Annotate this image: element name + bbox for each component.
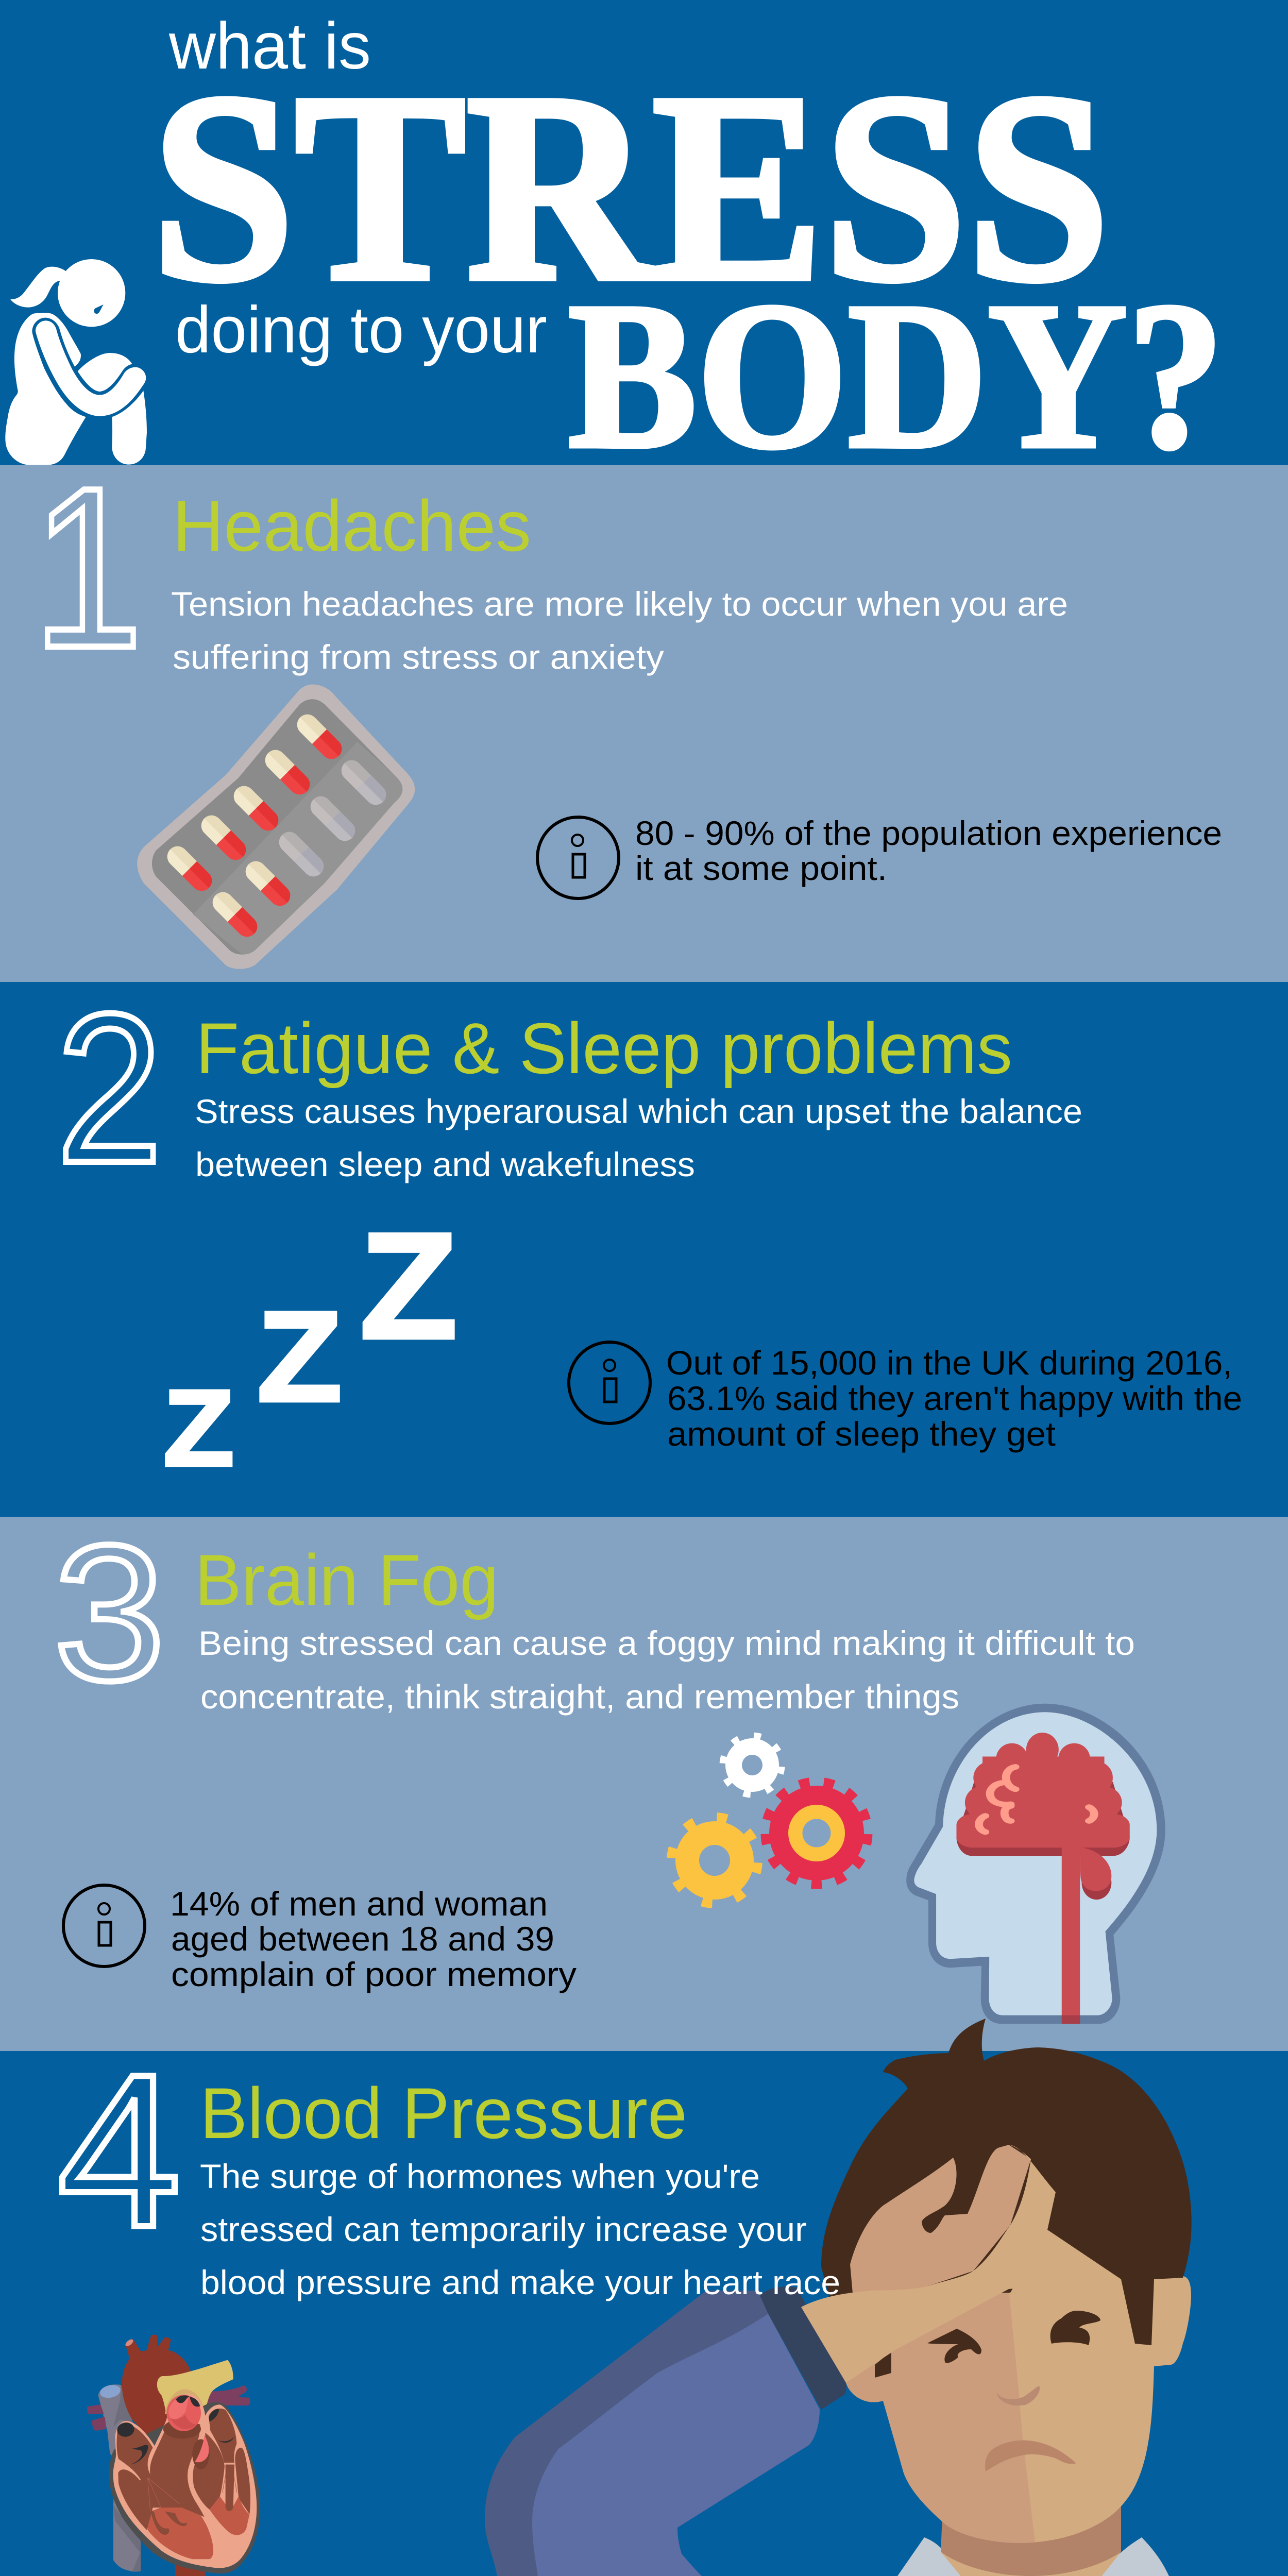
panel: brain fog background xyxy=(0,1517,1288,2051)
callout: population statistic xyxy=(635,814,1222,887)
text: brain fog description: Being stressed can cause a foggy mind making it difficult to xyxy=(198,1624,1135,1662)
callout: population statistic: 80 - 90% of the population experience xyxy=(635,814,1222,852)
icon: head with brain xyxy=(906,1704,1165,2024)
text: headaches description xyxy=(171,585,1068,676)
panel: fatigue background xyxy=(0,982,1288,1517)
icon: info xyxy=(537,817,619,899)
callout: memory statistic: complain of poor memory xyxy=(171,1955,577,1993)
callout: sleep survey statistic xyxy=(666,1344,1242,1453)
heading: blood pressure: Blood Pressure xyxy=(200,2073,687,2154)
icon: sleeping letters: Z xyxy=(360,1201,457,1370)
panel: blood pressure background xyxy=(0,2051,1288,2576)
number 2: 2 xyxy=(56,970,163,1207)
icon: info xyxy=(63,1885,145,1967)
text: fatigue description: between sleep and wakefulness xyxy=(195,1145,695,1183)
callout: population statistic: it at some point. xyxy=(635,849,887,887)
section 1: headaches xyxy=(32,440,1222,969)
title: what is xyxy=(168,9,371,83)
panel: header background xyxy=(0,0,1288,465)
icon: gears xyxy=(670,1734,872,1905)
heading: fatigue and sleep problems: Fatigue & Sleep problems xyxy=(196,1008,1012,1089)
text: brain fog description xyxy=(198,1624,1135,1716)
icon: sleeping letters: Z xyxy=(163,1368,234,1488)
heading: brain fog: Brain Fog xyxy=(195,1539,499,1620)
title: doing to your xyxy=(175,293,547,367)
icon: pill blister pack xyxy=(137,684,415,969)
callout: sleep survey statistic: 63.1% said they aren't happy with the xyxy=(667,1379,1242,1417)
callout: memory statistic: aged between 18 and 39 xyxy=(171,1920,554,1958)
title: BODY? xyxy=(568,259,1224,492)
icon: sleeping letters: Z xyxy=(257,1285,342,1429)
icon: stressed woman xyxy=(5,259,147,465)
text: brain fog description: concentrate, think straight, and remember things xyxy=(200,1677,959,1716)
text: headaches description: suffering from stress or anxiety xyxy=(173,638,664,676)
title: STRESS xyxy=(151,37,1110,337)
text: blood pressure description xyxy=(200,2157,840,2301)
number 1: 1 xyxy=(32,440,143,695)
icon: anatomical heart xyxy=(87,2335,260,2576)
callout: sleep survey statistic: amount of sleep they get xyxy=(667,1415,1056,1453)
callout: sleep survey statistic: Out of 15,000 in the UK during 2016, xyxy=(666,1344,1232,1382)
illustration: stressed man xyxy=(485,2019,1288,2576)
section 2: fatigue and sleep xyxy=(56,970,1242,1488)
callout: memory statistic: 14% of men and woman xyxy=(170,1885,548,1923)
text: fatigue description xyxy=(195,1092,1082,1183)
icon: sleeping letters xyxy=(163,1201,457,1488)
number 4: 4 xyxy=(57,2028,181,2273)
text: fatigue description: Stress causes hyperarousal which can upset the balance xyxy=(195,1092,1082,1130)
text: blood pressure description: The surge of hormones when you're xyxy=(200,2157,760,2195)
text: blood pressure description: stressed can temporarily increase your xyxy=(200,2210,807,2248)
text: blood pressure description: blood pressure and make your heart race xyxy=(200,2263,840,2301)
icon: info xyxy=(569,1342,650,1423)
section 4: blood pressure xyxy=(57,2028,840,2576)
title xyxy=(151,9,1224,492)
section 3: brain fog xyxy=(54,1505,1165,2024)
heading: headaches: Headaches xyxy=(173,485,531,566)
number 3: 3 xyxy=(54,1505,165,1721)
panel: headaches background xyxy=(0,465,1288,982)
text: headaches description: Tension headaches are more likely to occur when you are xyxy=(171,585,1068,623)
callout: memory statistic xyxy=(170,1885,577,1993)
